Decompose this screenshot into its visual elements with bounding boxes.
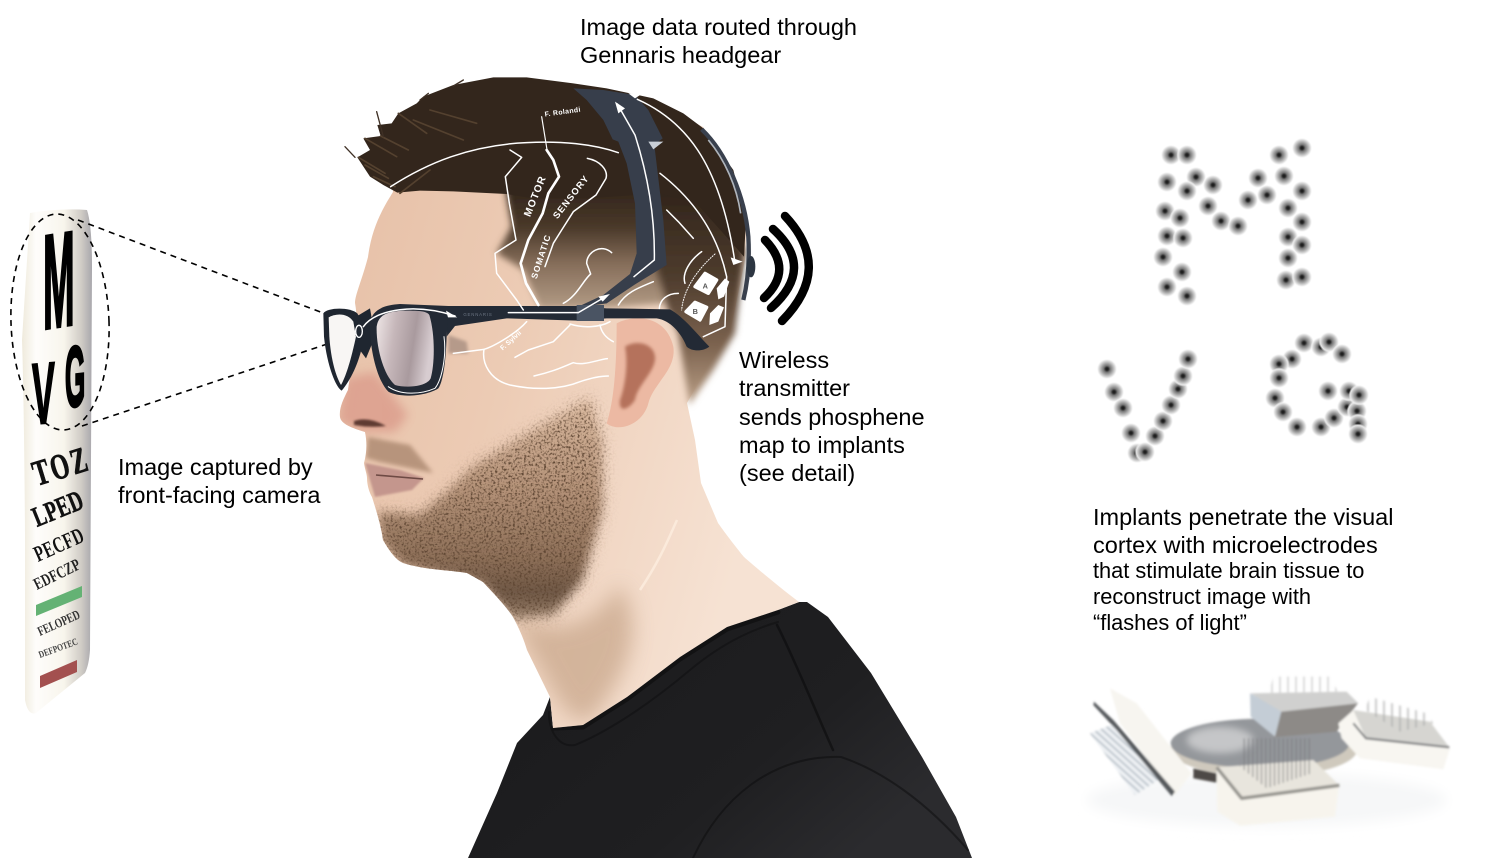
headband route arrow	[617, 104, 654, 277]
front implant rim	[1217, 767, 1339, 798]
head and neck	[340, 80, 799, 728]
label F. Sylvii: F. Sylvii	[499, 330, 523, 352]
chart row DEFPOTEC: DEFPOTEC	[37, 636, 79, 660]
glasses route arrow	[363, 309, 455, 327]
pad letters: A	[703, 281, 709, 290]
label GENNARIS: GENNARIS	[463, 312, 493, 317]
back implant top	[1251, 692, 1358, 712]
chart row EDFCZP: EDFCZP	[31, 556, 84, 594]
white brain map lines	[388, 117, 727, 393]
chart row TOZ: TOZ	[28, 439, 95, 494]
phosphene map: MVG dots	[1096, 138, 1370, 464]
back fade	[640, 183, 745, 405]
face shading, beard and stubble	[338, 372, 677, 720]
dotted arc	[682, 254, 715, 310]
neck shadow	[510, 585, 632, 720]
label SOMATIC: SOMATIC	[529, 233, 553, 280]
text: implants caption	[1093, 504, 1393, 635]
text: wireless transmitter caption: (see detail)	[739, 460, 855, 486]
ear	[607, 318, 674, 427]
text: wireless transmitter caption: sends phosphene	[739, 404, 925, 430]
camera ring	[356, 325, 362, 337]
arrowheads	[446, 93, 743, 317]
frame outline	[388, 337, 445, 393]
text: headgear caption	[580, 14, 857, 68]
near lens frame	[370, 304, 448, 396]
green bar	[36, 586, 82, 616]
left implant body	[1110, 688, 1192, 795]
right implant rim	[1353, 723, 1449, 747]
chart letter M: M	[43, 203, 75, 358]
front implant base	[1217, 762, 1339, 826]
implant photo contents	[1090, 677, 1450, 826]
text: camera caption	[118, 454, 320, 508]
temple arm	[447, 306, 709, 350]
coin face	[1171, 719, 1349, 768]
red bar	[40, 660, 77, 688]
connector pads	[686, 273, 729, 325]
chart letter V: V	[32, 344, 55, 442]
nose	[338, 372, 408, 432]
person wearing Gennaris headgear	[323, 77, 972, 858]
text: headgear caption: Image data routed through	[580, 14, 857, 40]
text: camera caption: Image captured by	[118, 454, 313, 480]
band highlight	[708, 140, 741, 213]
label MOTOR: MOTOR	[523, 174, 549, 218]
chart row FELOPED: FELOPED	[36, 608, 82, 639]
text: implants caption: that stimulate brain tissue to	[1093, 558, 1364, 583]
moustache	[366, 437, 433, 473]
gyrus curls	[563, 249, 612, 303]
shirt collar and seams	[549, 612, 968, 858]
label SENSORY: SENSORY	[551, 173, 591, 221]
beard tone	[378, 398, 602, 619]
white route arrows	[363, 99, 735, 327]
text: wireless transmitter caption: map to implants	[739, 432, 905, 458]
hair spike tips	[345, 80, 463, 157]
headband	[573, 88, 667, 307]
text: implants caption: “flashes of light”	[1093, 610, 1247, 635]
rear pads	[709, 278, 729, 325]
near lens	[377, 311, 434, 387]
back implant front	[1273, 703, 1358, 737]
text: wireless transmitter caption: transmitter	[739, 375, 850, 401]
superior arc	[391, 142, 618, 187]
far lens	[329, 314, 356, 385]
front implant top	[1217, 760, 1339, 798]
chart row PECFD: PECFD	[30, 523, 88, 567]
rear lobe outline	[660, 173, 727, 337]
text: wireless transmitter caption	[739, 347, 925, 486]
pointer line	[542, 117, 547, 152]
label F. Rolandi: F. Rolandi	[544, 107, 581, 119]
temple connector	[577, 305, 604, 321]
text: camera caption: front-facing camera	[118, 482, 320, 508]
right implant base	[1338, 710, 1450, 769]
left implant metal edge	[1093, 702, 1175, 796]
temple fade	[497, 187, 667, 308]
text: wireless transmitter caption: Wireless	[739, 347, 829, 373]
lateral fissure F. Sylvii	[453, 322, 527, 353]
right implant pins	[1365, 697, 1433, 732]
back implant side	[1250, 693, 1282, 737]
back band	[702, 129, 749, 300]
headband clip highlight	[648, 142, 663, 149]
beard stubble	[378, 398, 602, 619]
dashed focus ellipse and sight lines	[7, 212, 360, 432]
central fissure F. Rolandi	[521, 150, 559, 305]
shirt	[468, 602, 972, 858]
far lens frame	[323, 309, 365, 391]
hair top	[357, 77, 746, 257]
back implant pins	[1268, 677, 1340, 695]
chart row LPED: LPED	[28, 484, 88, 534]
implants photo	[1087, 677, 1450, 827]
text: implants caption: Implants penetrate the visual	[1093, 504, 1393, 530]
icon: wireless waves	[764, 216, 809, 321]
wireless transmitter knob	[747, 256, 755, 277]
somatic line	[545, 158, 606, 267]
chart letter G: G	[65, 329, 85, 426]
coin edge	[1193, 768, 1217, 783]
coin rim	[1171, 722, 1357, 777]
coin highlight	[1187, 727, 1253, 753]
mouth line	[376, 475, 423, 479]
eye chart	[22, 203, 95, 713]
hair, ear and headgear drawn in detail coordinates	[323, 77, 755, 427]
soft shadow	[1087, 773, 1447, 827]
text: implants caption: cortex with microelectrodes	[1093, 532, 1378, 558]
eye corner	[448, 335, 468, 353]
nostril	[354, 419, 386, 427]
lips	[365, 463, 424, 497]
precentral line	[495, 150, 523, 310]
pad B	[686, 302, 707, 320]
right implant top	[1353, 710, 1449, 747]
left implant pins	[1090, 723, 1163, 795]
front implant pins	[1240, 738, 1312, 788]
hair fade	[497, 183, 745, 405]
neck scar line	[640, 520, 677, 590]
text: headgear caption: Gennaris headgear	[580, 42, 781, 68]
temple route arrow	[508, 296, 607, 313]
rear route arrow	[637, 99, 735, 263]
pad A	[695, 273, 717, 293]
ear inner shading	[620, 343, 655, 409]
connector pads: B	[693, 307, 698, 316]
bridge and camera	[353, 308, 375, 358]
text: implants caption: reconstruct image with	[1093, 584, 1311, 609]
hair streaks	[358, 110, 477, 193]
